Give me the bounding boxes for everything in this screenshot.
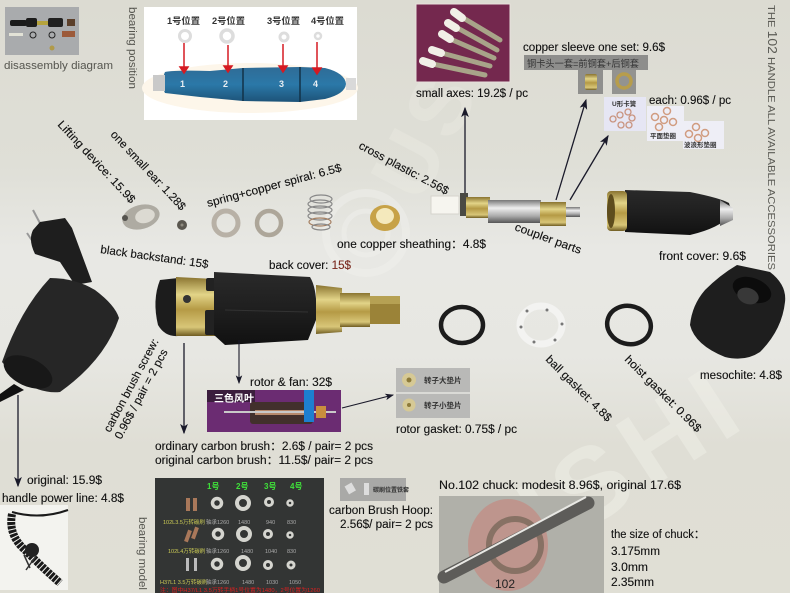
caption bar: copper sleeve — [524, 55, 648, 70]
panel: bearing model board: 1040 — [265, 549, 277, 555]
image: front copper sleeve — [578, 70, 603, 94]
label: one copper sheathing: one copper sheathing：4.8$ — [337, 239, 487, 251]
label: carbon brush screw price: 0.96$ / pair = 2 pcs — [113, 347, 171, 441]
panel: bearing position photo — [142, 7, 358, 120]
arrow: to handle power line — [17, 395, 19, 486]
panel: bearing model board: 3号 — [264, 482, 276, 491]
arrow: coupler to copper sleeve — [556, 100, 586, 200]
panel: bearing position photo: 3 — [279, 79, 284, 89]
label: coupler parts: coupler parts — [513, 222, 583, 257]
label: handle power line price: handle power line: 4.8$ — [2, 493, 125, 505]
panel: bearing position photo: 4 — [313, 79, 318, 89]
part: flat washer two — [257, 211, 281, 235]
panel: bearing model board: 1480 — [242, 580, 254, 586]
part: mesochite — [690, 265, 785, 359]
image: rotor and fan: 三色风叶 — [214, 392, 254, 405]
label: front cover price: front cover: 9.6$ — [659, 251, 747, 263]
part: small ear — [177, 220, 187, 230]
image: rotor and fan — [207, 390, 341, 432]
vertical title: THE 102 HANDLE ALL AVAILABLE ACCESSORIES — [765, 5, 780, 270]
part: right black gasket — [603, 301, 655, 349]
panel: bearing position photo: 4号位置 — [311, 15, 344, 26]
label: black backstand: black backstand: 15$ — [100, 244, 210, 271]
label: spring and copper spiral: spring+copper spiral: 6.5$ — [206, 162, 344, 210]
arrow: to rotor and fan — [238, 340, 240, 383]
label: copper sleeve price: copper sleeve one set: 9.6$ — [523, 42, 666, 54]
arrow: to carbon brush — [183, 343, 185, 433]
label: disassembly diagram: disassembly diagram — [4, 60, 113, 72]
panel: bearing position photo: 1 — [180, 79, 185, 89]
panel: bearing position photo: 3号位置 — [267, 15, 300, 26]
image: rotor gasket swatches — [396, 368, 470, 418]
panel: bearing model board: 830 — [287, 549, 296, 555]
label: small axes price: small axes: 19.2$ / pc — [416, 88, 528, 100]
image: chuck photo: 102 — [495, 577, 515, 591]
part: spring — [308, 195, 332, 230]
label: bearing position: bearing position — [126, 7, 138, 89]
label: cross plastic: cross plastic: 2.56$ — [357, 140, 451, 198]
panel: bearing model board: 1480 — [238, 520, 250, 526]
label: carbon brush hoop price: 2.56$/ pair= 2 pcs — [340, 519, 433, 531]
image: disassembly diagram thumbnail — [5, 7, 79, 55]
part: flat washer one — [214, 211, 238, 235]
label: ordinary carbon brush: ordinary carbon brush：2.6$ / pair= 2 pcs — [155, 441, 373, 453]
image: rotor gasket swatches: 转子小垫片 — [424, 400, 462, 410]
panel: bearing model board: 4号 — [290, 482, 302, 491]
image: flat washers: 平面垫圈 — [650, 131, 676, 140]
image: chuck photo — [439, 496, 604, 593]
image: U spring clips — [604, 97, 646, 131]
part: handle back assembly — [155, 272, 400, 345]
label: original price: original: 15.9$ — [27, 475, 103, 487]
image: rear copper sleeve — [612, 70, 636, 94]
label: carbon brush screw: carbon brush screw: — [102, 337, 161, 434]
label: chuck size 3.0mm: 3.0mm — [611, 562, 648, 574]
panel: bearing model board: 940 — [266, 520, 275, 526]
panel: bearing model board: 102L4万转碳刷 — [168, 547, 206, 555]
panel: bearing model board: H37L1 3.5万转碳刷 — [160, 578, 208, 586]
panel: bearing position photo: 2 — [223, 79, 228, 89]
part: lifting device ring — [120, 200, 162, 234]
panel: bearing model board: 轴承1260 — [206, 518, 229, 526]
panel: bearing model board: 102L3.5万转碳刷 — [163, 518, 205, 526]
label: one small ear: one small ear: 1.28$ — [108, 129, 188, 214]
panel: bearing model board: 830 — [287, 520, 296, 526]
label: chuck size 2.35mm: 2.35mm — [611, 577, 654, 589]
label: rotor and fan price: rotor & fan: 32$ — [250, 377, 333, 389]
label: No.102 chuck prices: No.102 chuck: modesit 8.96$, original 17.6$ — [439, 480, 682, 492]
part: front cover — [607, 190, 733, 235]
panel: bearing model board: 1030 — [266, 580, 278, 586]
image: small axes photo — [416, 4, 510, 82]
arrow: rotor to rotor gasket — [342, 395, 393, 408]
part: ball gasket — [520, 306, 564, 344]
arrow: coupler to springs — [570, 136, 608, 200]
label: chuck size 3.175mm: 3.175mm — [611, 546, 660, 558]
label: each price: each: 0.96$ / pc — [649, 95, 731, 107]
watermark: USHI — [459, 343, 766, 593]
caption bar: copper sleeve: 铜卡头一套=前铜套+后铜套 — [527, 58, 639, 70]
image: flat washers — [647, 106, 684, 141]
part: power plug and handle tail — [0, 210, 119, 402]
part: coupler assembly — [431, 193, 580, 226]
position labels: 1号位置 — [167, 15, 200, 26]
part: copper sheathing — [370, 205, 400, 231]
label: back cover: back cover: 15$ — [269, 260, 352, 272]
panel: bearing model board: 1480 — [241, 549, 253, 555]
image: rotor gasket swatches: 转子大垫片 — [424, 375, 462, 385]
part: left black gasket — [441, 307, 483, 343]
panel: bearing model board: 2号 — [236, 482, 248, 491]
panel: bearing position photo: 2号位置 — [212, 15, 245, 26]
panel: bearing model board: 1号 — [207, 482, 219, 491]
image: U spring clips: U形卡簧 — [612, 99, 637, 108]
panel: bearing model board: 轴承1260 — [206, 547, 229, 555]
label: hoist gasket: hoist gasket: 0.96$ — [622, 354, 704, 435]
label: chuck size heading: the size of chuck： — [611, 529, 705, 541]
arrow: coupler to small axes — [464, 108, 466, 200]
image: wave washers: 波浪形垫圈 — [684, 140, 717, 149]
panel: bearing model board — [155, 478, 324, 593]
image: carbon brush hoop — [340, 478, 409, 501]
label: bearing model: bearing model — [136, 517, 148, 590]
label: original carbon brush: original carbon brush：11.5$/ pair= 2 pcs — [155, 455, 373, 467]
label: ball gasket: ball gasket: 4.8$ — [543, 354, 614, 425]
label: mesochite price: mesochite: 4.8$ — [700, 370, 783, 382]
image: carbon brush hoop: 碳刷位置铁套 — [373, 486, 409, 494]
panel: bearing model board: 1050 — [289, 580, 301, 586]
label: Lifting device: Lifting device: 15.9$ — [55, 119, 138, 206]
image: wave washers — [683, 121, 724, 149]
watermark — [326, 0, 766, 593]
label: carbon brush hoop: carbon Brush Hoop: — [329, 505, 433, 517]
image: coiled power line — [0, 505, 68, 590]
panel: bearing model board: 轴承1260 — [206, 578, 229, 586]
label: rotor gasket price: rotor gasket: 0.75$ / pc — [396, 424, 517, 436]
